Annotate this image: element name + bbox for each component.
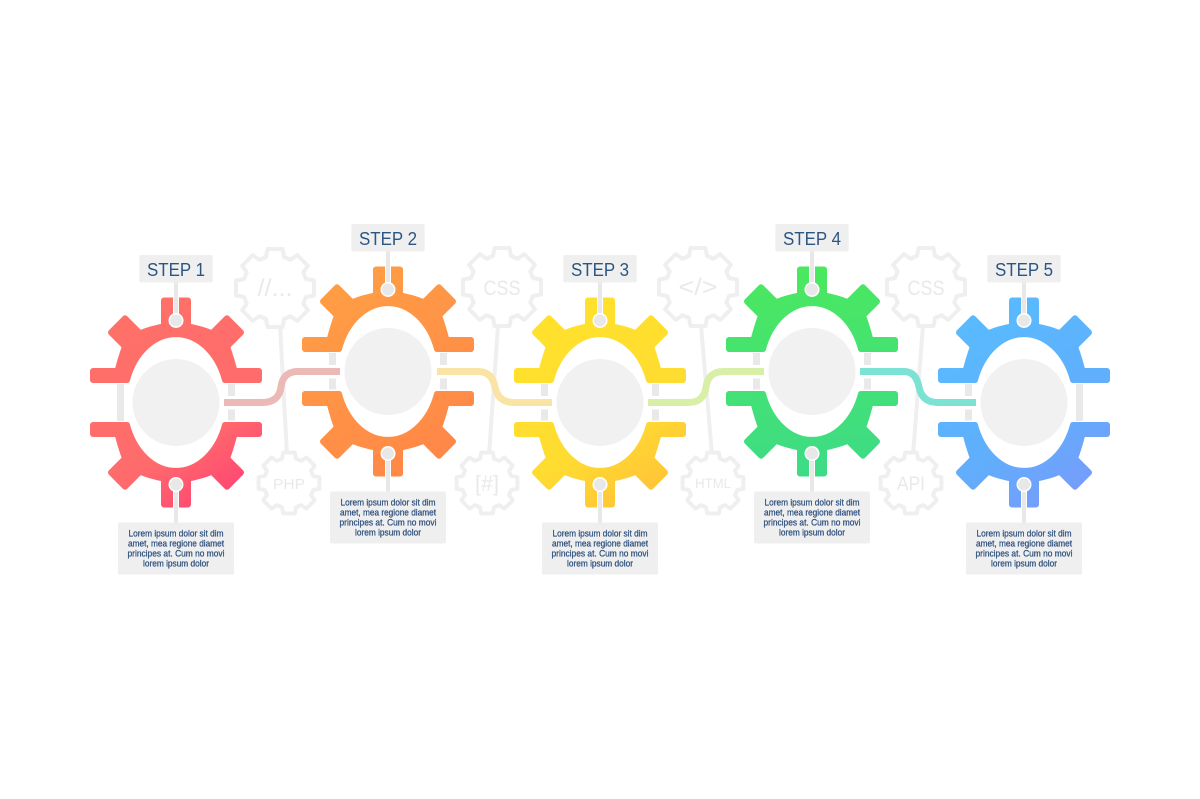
- description: step 3: amet, mea regione diamet: [552, 538, 648, 548]
- pin bottom: [168, 477, 184, 524]
- side bars: [117, 384, 235, 421]
- ghost gear: comment slashes: //...: [258, 275, 292, 302]
- ghost gear: comment slashes: [236, 249, 314, 327]
- description: step 1: [118, 522, 234, 574]
- description: step 3: principes at. Cum no movi: [552, 548, 648, 558]
- pipe: step 3 to step 4: [648, 372, 764, 402]
- center circle: [768, 328, 856, 415]
- gear: yellow: [517, 300, 683, 504]
- ghost gear: CSS second: CSS: [908, 277, 944, 300]
- pin top: [592, 282, 608, 328]
- description: step 3: lorem ipsum dolor: [567, 558, 633, 568]
- pipe: step 4 to step 5: [860, 372, 976, 402]
- pipe: step 1 to step 2: [224, 372, 340, 402]
- gear: blue: [941, 300, 1107, 504]
- description: step 2: amet, mea regione diamet: [340, 508, 436, 518]
- description: step 5: principes at. Cum no movi: [976, 548, 1072, 558]
- ghost gear: CSS second: [887, 248, 965, 326]
- description: step 1: Lorem ipsum dolor sit dim: [128, 528, 224, 538]
- ghost gear: code tag: </>: [678, 274, 718, 301]
- ghost gear: PHP: PHP: [273, 476, 305, 493]
- pin bottom: [1016, 477, 1032, 524]
- description: step 4: principes at. Cum no movi: [764, 518, 860, 528]
- ghost gear: CSS: CSS: [484, 277, 520, 300]
- ghost gear: hash: [#]: [475, 471, 499, 496]
- panel: step 1: [93, 255, 259, 574]
- description: step 2: principes at. Cum no movi: [340, 518, 436, 528]
- label: step 1: [139, 255, 213, 282]
- description: step 2: Lorem ipsum dolor sit dim: [340, 498, 436, 508]
- description: step 4: [754, 492, 870, 544]
- ghost gear: PHP: [259, 453, 319, 513]
- ghost gear: HTML: [683, 453, 743, 513]
- description: step 5: [966, 522, 1082, 574]
- description: step 2: [330, 492, 446, 544]
- panel: step 2: [305, 224, 471, 544]
- pin bottom: [380, 446, 396, 492]
- label: step 3: STEP 3: [571, 260, 629, 280]
- panel: step 3: [517, 255, 683, 574]
- description: step 5: Lorem ipsum dolor sit dim: [976, 528, 1072, 538]
- pin top: [168, 282, 184, 328]
- label: step 5: STEP 5: [995, 260, 1053, 280]
- center circle: [344, 328, 432, 415]
- description: step 1: amet, mea regione diamet: [128, 538, 224, 548]
- side bars: [329, 353, 447, 390]
- description: step 4: lorem ipsum dolor: [779, 528, 845, 538]
- ghost gear: API: [881, 453, 941, 513]
- ghost gear: code tag: [659, 248, 737, 326]
- pipe: step 2 to step 3: [437, 372, 552, 402]
- center circle: [980, 359, 1068, 446]
- pin top: [804, 250, 820, 297]
- gear: green: [729, 270, 895, 474]
- pin bottom: [804, 446, 820, 492]
- description: step 4: amet, mea regione diamet: [764, 508, 860, 518]
- ghost gear: HTML: HTML: [695, 475, 731, 491]
- gear: orange: [305, 270, 471, 474]
- pin top: [1016, 282, 1032, 328]
- pin top: [380, 250, 396, 297]
- label: step 4: [775, 224, 849, 252]
- label: step 2: STEP 2: [359, 229, 417, 249]
- side bars: [753, 353, 871, 390]
- description: step 4: Lorem ipsum dolor sit dim: [764, 498, 860, 508]
- side bars: [541, 384, 659, 420]
- description: step 5: lorem ipsum dolor: [991, 558, 1057, 568]
- description: step 5: amet, mea regione diamet: [976, 538, 1072, 548]
- label: step 2: [351, 224, 425, 252]
- pin bottom: [592, 477, 608, 524]
- label: step 3: [563, 255, 637, 282]
- center circle: [132, 359, 220, 446]
- ghost gear: CSS: [463, 248, 541, 326]
- description: step 3: Lorem ipsum dolor sit dim: [552, 528, 648, 538]
- description: step 3: [542, 522, 658, 574]
- connector lines between ghost gears: [280, 325, 923, 455]
- label: step 4: STEP 4: [783, 229, 841, 249]
- description: step 2: lorem ipsum dolor: [355, 528, 421, 538]
- panel: step 4: [729, 224, 895, 544]
- gear: red: [93, 300, 259, 504]
- ghost gear: hash: [457, 453, 517, 513]
- label: step 1: STEP 1: [147, 260, 205, 280]
- center circle: [556, 359, 644, 446]
- description: step 1: principes at. Cum no movi: [128, 548, 224, 558]
- description: step 1: lorem ipsum dolor: [143, 558, 209, 568]
- side bars: [965, 384, 1083, 421]
- label: step 5: [987, 255, 1061, 282]
- panel: step 5: [941, 255, 1107, 574]
- ghost gear: API: API: [897, 474, 925, 495]
